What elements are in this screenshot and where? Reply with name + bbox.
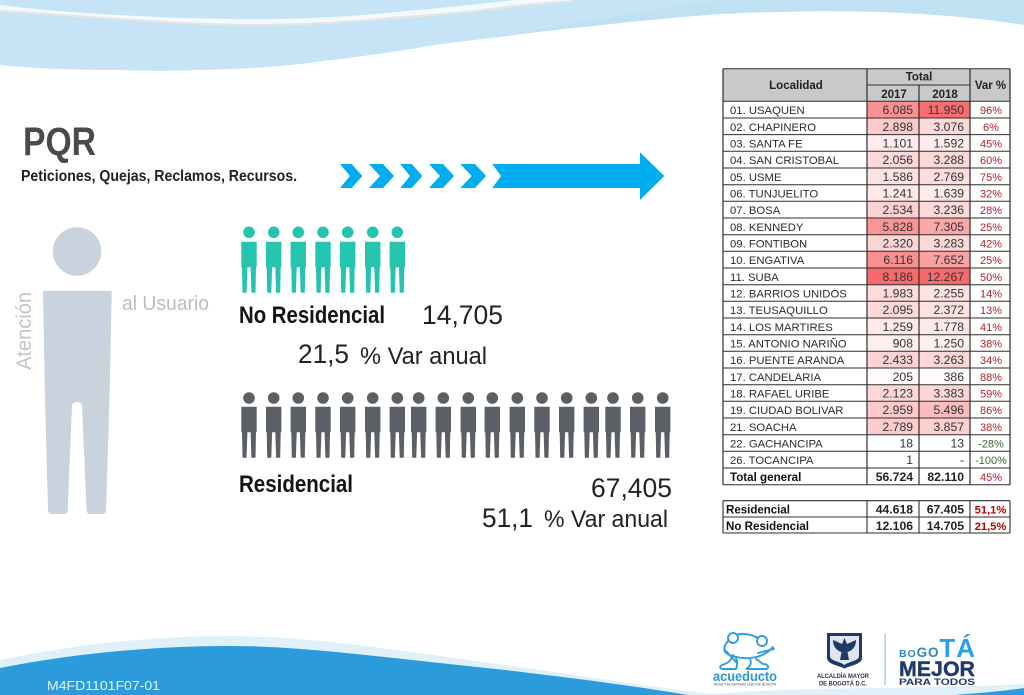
row: Usaquén [730,101,1002,118]
row: Bosa: 2.534 [882,203,913,217]
bogotá wordmark: BOGOTÁ [899,633,975,663]
row: Rafael Uribe: 18. RAFAEL URIBE [730,389,830,401]
row: Ciudad Bolívar [730,401,1002,418]
icon: frog [720,633,774,669]
alcaldía text: DE BOGOTÁ D.C. [819,678,867,688]
row: Antonio Nariño: 15. ANTONIO NARIÑO [730,338,847,351]
table header: Localidad [769,80,823,92]
logo: acueducto [713,633,777,686]
row: Santa Fe [730,135,1002,151]
row: Teusaquillo: 2.372 [934,303,964,317]
row: Ciudad Bolívar: 86% [980,405,1002,417]
row: Ciudad Bolívar: 2.959 [882,403,913,417]
row: Tunjuelito [730,185,1002,201]
row: Antonio Nariño: 1.250 [934,337,964,351]
table header: Total [906,72,932,84]
row: Bosa [730,201,1002,218]
row: Puente Aranda [730,351,1002,368]
row: Kennedy: 5.828 [882,220,913,234]
row: Soacha: 21. SOACHA [730,422,797,434]
row: Kennedy [730,218,1002,235]
large user figure [43,227,112,514]
row: Chapinero: 3.076 [934,120,964,134]
teal people: no residencial [241,226,405,293]
footer code: M4FD1101F07-01 [47,678,160,693]
row: total general [730,470,1002,484]
row: Santa Fe: 1.101 [882,136,913,150]
acueducto wordmark: acueducto [713,668,777,684]
row: Rafael Uribe: 2.123 [882,387,913,401]
row: Santa Fe: 1.592 [934,136,964,150]
row: Chapinero [730,118,999,135]
summary table: 12.106 [876,519,913,533]
row: total general: 45% [980,472,1002,484]
row: Candelaria: 205 [893,370,913,384]
row: Chapinero: 02. CHAPINERO [730,122,816,134]
residencial value: 67,405 [591,473,672,503]
table header: 2018 [932,89,958,101]
alcaldía text: ALCALDÍA MAYOR [817,671,869,680]
row: Rafael Uribe: 3.383 [934,387,964,401]
row: Engativá: 25% [980,255,1002,267]
row: Engativá: 7.652 [934,253,964,267]
row: Fontibón: 09. FONTIBON [730,239,807,251]
row: Santa Fe: 03. SANTA FE [730,138,803,150]
no residencial heading: No Residencial [239,302,385,329]
row: Tocancipá: 26. TOCANCIPA [730,455,814,467]
row: Los Mártires [730,318,1002,335]
no residencial variation: % Var anual [360,343,487,370]
row: Usme: 05. USME [730,172,782,184]
row: Ciudad Bolívar: 5.496 [934,403,964,417]
row: Suba: 11. SUBA [730,272,779,284]
row: Usme: 1.586 [882,170,913,184]
row: Soacha [730,418,1002,435]
bottom wave banner [0,636,1024,695]
row: Usaquén: 96% [980,105,1002,117]
row: Tunjuelito: 06. TUNJUELITO [730,189,818,201]
row: Gachancipá: 18 [899,437,913,451]
grey people: residencial [241,392,670,458]
top wave banner [0,0,1024,71]
row: Chapinero: 6% [983,122,999,134]
row: Ciudad Bolívar: 19. CIUDAD BOLIVAR [730,405,843,417]
logo: bogotá mejor para todos [899,633,975,688]
row: Gachancipá [730,437,1004,451]
residencial variation: 51,1 [482,503,533,533]
logo: alcaldía mayor [817,633,869,688]
row: Barrios Unidos: 12. BARRIOS UNIDOS [730,289,847,301]
arrow [340,152,664,200]
row: Tocancipá: 1 [906,453,913,467]
row: Tunjuelito: 1.241 [882,187,913,201]
row: Kennedy: 08. KENNEDY [730,222,804,234]
title: PQR [23,120,96,164]
table header: Var % [975,80,1006,92]
row: San Cristóbal: 2.056 [882,153,913,167]
subtitle: Peticiones, Quejas, Reclamos, Recursos. [21,168,297,185]
row: Tocancipá: - [960,453,964,467]
row: Fontibón: 2.320 [882,237,913,251]
table header: 2017 [881,89,907,101]
row: Suba: 50% [980,272,1002,284]
no residencial variation: 21,5 [298,339,349,369]
row: Kennedy: 7.305 [934,220,964,234]
row: Antonio Nariño: 38% [980,339,1002,351]
row: Tunjuelito: 32% [980,189,1002,201]
row: Los Mártires: 14. LOS MARTIRES [730,322,833,334]
row: Teusaquillo [730,301,1002,318]
label: Atención: Atención [13,292,36,370]
row: Los Mártires: 41% [980,322,1002,334]
table header [723,69,1010,101]
row: Teusaquillo: 2.095 [882,303,913,317]
summary table [723,501,1010,533]
row: Fontibón [730,235,1002,251]
row: Fontibón: 3.283 [934,237,964,251]
row: Chapinero: 2.898 [882,120,913,134]
row: Candelaria [730,368,1002,385]
acueducto tagline: AGUA Y ALCANTARILLADO DE BOGOTÁ [714,682,777,686]
row: Suba: 8.186 [882,270,913,284]
row: Puente Aranda: 3.263 [934,353,964,367]
row: total general: 82.110 [927,470,964,484]
row: Fontibón: 42% [980,239,1002,251]
row: Los Mártires: 1.259 [882,320,913,334]
summary table: Residencial [726,504,790,516]
row: Bosa: 07. BOSA [730,205,781,217]
row: Antonio Nariño [730,335,1002,351]
row: Barrios Unidos: 1.983 [882,287,913,301]
row: Usme: 75% [980,172,1002,184]
row: Puente Aranda: 2.433 [882,353,913,367]
row: Usaquén: 01. USAQUEN [730,105,805,117]
row: Gachancipá: 13 [950,437,964,451]
row: San Cristóbal: 60% [980,155,1002,167]
summary table: 14.705 [927,519,964,533]
summary table: 21,5% [975,521,1006,533]
row: Candelaria: 88% [980,372,1002,384]
alcaldía text [817,671,869,688]
row: Puente Aranda: 34% [980,355,1002,367]
row: Suba: 12.267 [927,270,964,284]
row: Candelaria: 386 [944,370,964,384]
row: Gachancipá: 22. GACHANCIPA [730,439,823,451]
row: Usaquén: 6.085 [882,103,913,117]
row: Usme: 2.769 [934,170,964,184]
summary table: 51,1% [975,504,1006,516]
row: Soacha: 38% [980,422,1002,434]
residencial heading: Residencial [239,471,353,498]
data table by locality [723,69,1010,485]
row: Soacha: 2.789 [882,420,913,434]
divider [885,633,886,685]
row: Puente Aranda: 16. PUENTE ARANDA [730,355,845,367]
row: Teusaquillo: 13. TEUSAQUILLO [730,305,828,317]
row: Soacha: 3.857 [934,420,964,434]
row: Engativá [730,251,1002,268]
residencial variation: % Var anual [544,506,668,533]
row: Barrios Unidos [730,285,1002,301]
row: Tocancipá: -100% [975,455,1007,467]
row: Suba [730,268,1002,285]
row: Barrios Unidos: 2.255 [934,287,964,301]
row: Kennedy: 25% [980,222,1002,234]
icon: shield [827,633,862,668]
row: total general: Total general [730,471,801,484]
mejor wordmark: MEJOR [899,658,975,681]
summary table: No Residencial [726,520,809,533]
row: San Cristóbal: 04. SAN CRISTOBAL [730,155,839,167]
row: Gachancipá: -28% [978,439,1004,451]
row: Bosa: 28% [980,205,1002,217]
summary table: 67.405 [927,502,964,516]
row: Usme [730,168,1002,185]
row: Teusaquillo: 13% [980,305,1002,317]
row: Candelaria: 17. CANDELARIA [730,372,822,384]
row: Los Mártires: 1.778 [934,320,964,334]
row: total general: 56.724 [876,470,913,484]
row: Rafael Uribe: 59% [980,389,1002,401]
para todos wordmark: PARA TODOS [899,677,975,688]
summary table: 44.618 [876,502,913,516]
no residencial variation [298,339,487,370]
row: San Cristóbal: 3.288 [934,153,964,167]
row: Santa Fe: 45% [980,138,1002,150]
row: Engativá: 6.116 [883,253,913,267]
residencial variation [482,503,668,533]
row: San Cristóbal [730,151,1002,168]
row: Rafael Uribe [730,385,1002,401]
row: Tunjuelito: 1.639 [934,187,964,201]
row: Engativá: 10. ENGATIVA [730,255,805,267]
row: Barrios Unidos: 14% [980,289,1002,301]
row: Tocancipá [730,453,1007,467]
no residencial value: 14,705 [422,300,503,330]
row: Bosa: 3.236 [934,203,964,217]
row: Antonio Nariño: 908 [893,337,913,351]
row: Usaquén: 11.950 [928,103,964,117]
label: al Usuario: al Usuario [122,293,209,315]
